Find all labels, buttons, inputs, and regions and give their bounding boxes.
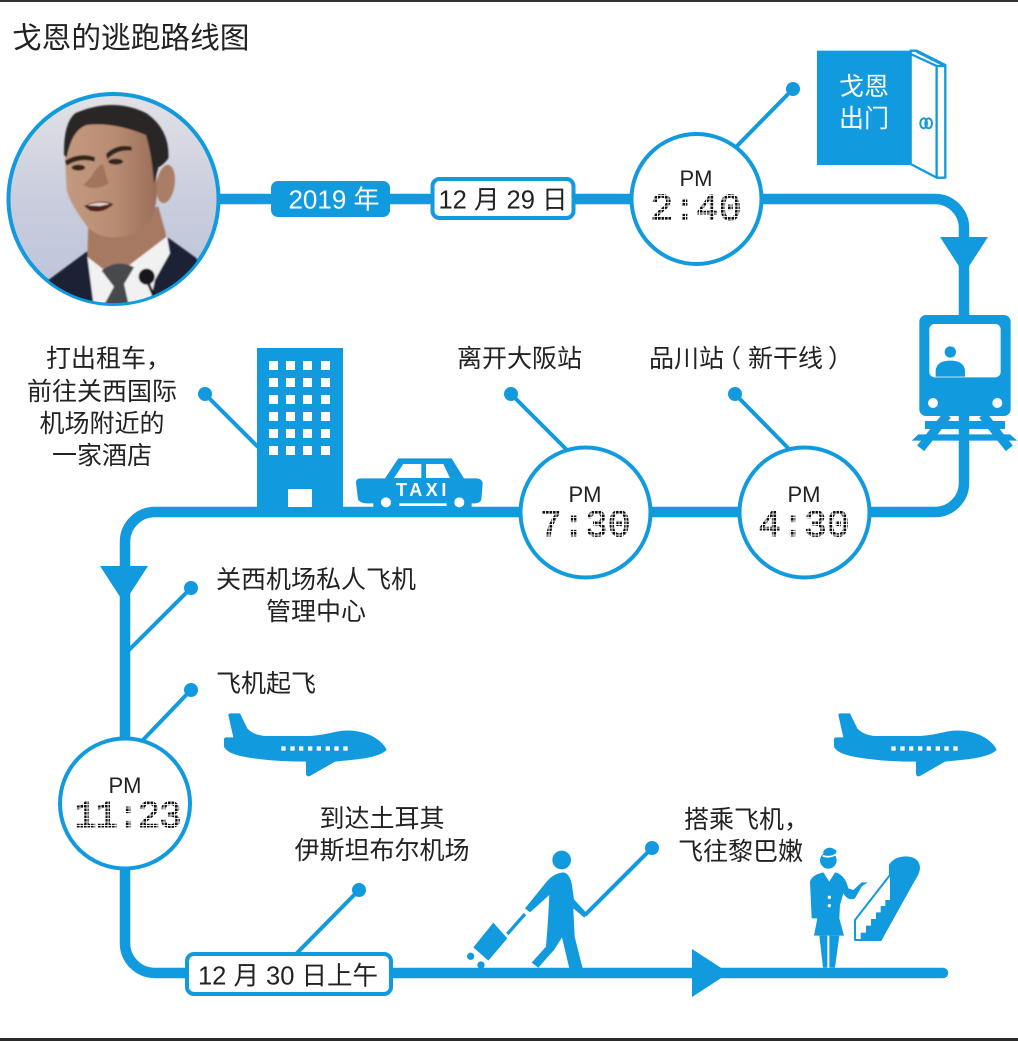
time circle 11:23: PM (108, 773, 142, 798)
date label: 2019 (271, 181, 390, 217)
date label: Dec 29: 12 月 29 日 (439, 186, 567, 214)
label: arrive Istanbul: 伊斯坦布尔机场 (294, 837, 470, 865)
route line (125, 199, 964, 973)
time circle 11:23 (60, 738, 190, 868)
arrow: right bottom (692, 949, 729, 997)
icon: plane left (224, 713, 387, 776)
label: arrive Istanbul: 到达土耳其 (319, 805, 445, 833)
date label: Dec 30 (187, 954, 391, 994)
arrow: down left (100, 566, 148, 603)
label: taxi to hotel: 一家酒店 (52, 442, 152, 470)
icon: plane right (834, 713, 997, 776)
icon: escalator (855, 857, 919, 940)
icon: flight attendant (810, 848, 868, 968)
door label (839, 73, 889, 133)
date label: Dec 29 (432, 179, 574, 218)
time circle 2:40: 2:40 (650, 189, 742, 232)
label: Shinagawa: 品川站 (649, 345, 724, 373)
time circle 4:30: PM (788, 482, 820, 507)
label: taxi to hotel: 前往关西国际 (27, 378, 177, 406)
time circle 2:40: PM (680, 166, 712, 191)
label: Shinagawa: ） (828, 345, 853, 373)
label: fly to Lebanon: 飞往黎巴嫩 (678, 838, 803, 866)
label: Kansai private jet center: 关西机场私人飞机 (216, 566, 416, 594)
title: 戈恩的逃跑路线图 (12, 22, 250, 55)
label: Shinagawa: 新干线 (748, 345, 823, 373)
portrait (8, 94, 218, 320)
label: taxi to hotel: 打出租车， (46, 345, 171, 373)
icon: door (817, 51, 945, 178)
door label: 戈恩 (839, 73, 889, 101)
label: fly to Lebanon (678, 806, 809, 866)
arrow: down right (940, 237, 988, 274)
time circle 4:30 (740, 448, 870, 578)
time circle 11:23: 11:23 (74, 796, 180, 839)
icon: taxi (356, 458, 483, 508)
time circle 2:40 (632, 134, 762, 264)
date label: Dec 30: 12 月 30 日上午 (198, 962, 378, 990)
label: takeoff: 飞机起飞 (216, 670, 316, 698)
label: fly to Lebanon: 搭乘飞机， (684, 806, 809, 834)
icon: train (912, 315, 1017, 460)
time circle 7:30 (520, 448, 650, 578)
icon: traveler with suitcase (467, 851, 587, 969)
time circle 7:30: PM (568, 482, 602, 507)
label: taxi to hotel (27, 345, 177, 470)
label: leave Osaka: 离开大阪站 (457, 345, 582, 373)
time circle 4:30: 4:30 (758, 505, 850, 548)
icon: hotel building (257, 348, 343, 508)
label: Kansai private jet center (216, 566, 416, 626)
label: Shinagawa: （ (716, 345, 741, 373)
label: taxi to hotel: 机场附近的 (39, 410, 165, 438)
door label: 出门 (839, 105, 889, 133)
label: arrive Istanbul (294, 805, 470, 865)
connector lines (128, 82, 800, 954)
label: Kansai private jet center: 管理中心 (266, 598, 366, 626)
icon: taxi: TAXI (396, 480, 450, 500)
time circle 7:30: 7:30 (539, 505, 631, 548)
date label: 2019: 2019 年 (288, 184, 380, 214)
